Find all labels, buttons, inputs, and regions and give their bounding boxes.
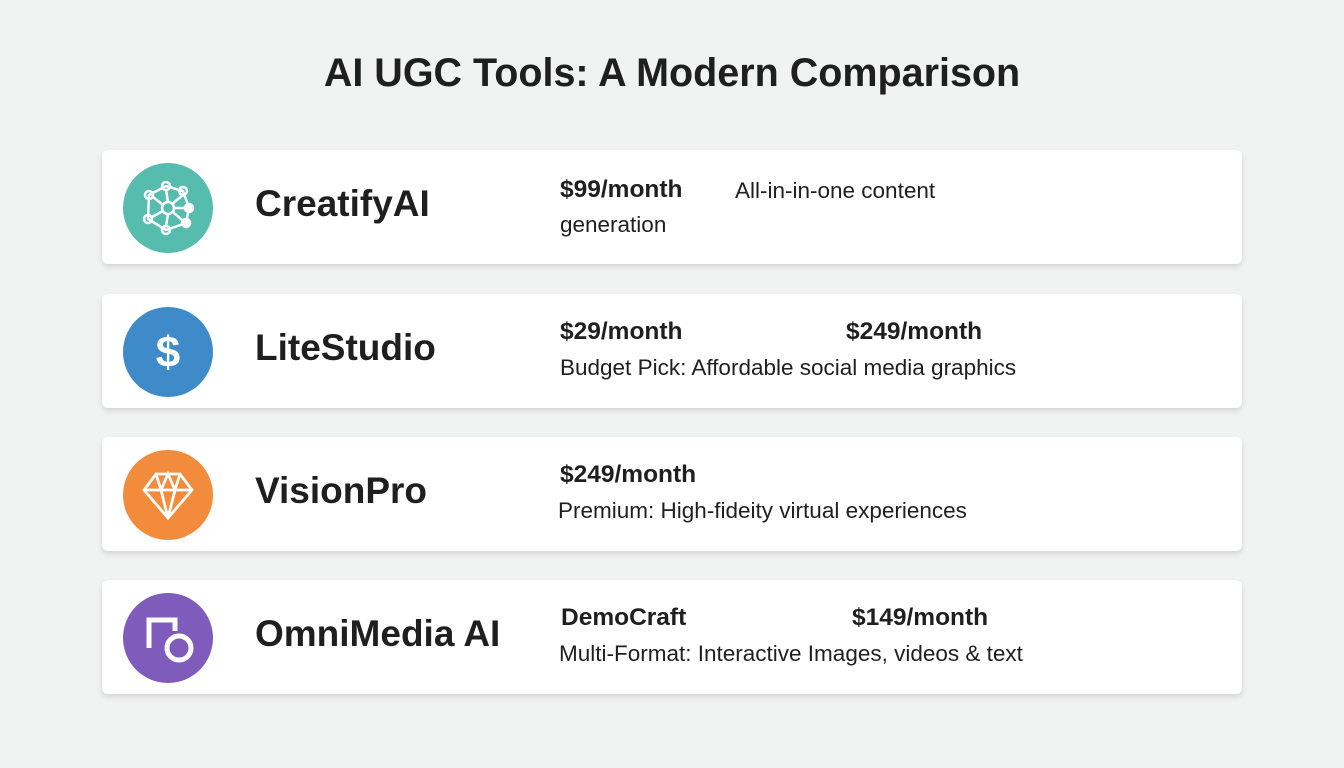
price: $249/month: [560, 461, 696, 488]
price: $149/month: [852, 604, 988, 631]
title: AI UGC Tools: A Modern Comparison: [324, 51, 1020, 95]
icon: dollar: [123, 307, 213, 397]
card: OmniMedia AI: [102, 580, 1242, 694]
description: Premium: High-fideity virtual experiences: [558, 498, 967, 523]
card: LiteStudio: $249/month: [846, 318, 982, 345]
name: LiteStudio: [255, 327, 436, 368]
name: CreatifyAI: [255, 183, 430, 224]
name: OmniMedia AI: [255, 613, 500, 654]
name: VisionPro: [255, 470, 427, 511]
card: CreatifyAI: [102, 150, 1242, 264]
prices: $29/month: [560, 318, 683, 345]
icon: dollar: $: [156, 328, 180, 377]
description: Multi-Format: Interactive Images, videos & text: [559, 641, 1023, 666]
icon: diamond: [123, 450, 213, 540]
card: VisionPro: [102, 437, 1242, 551]
description: All-in-in-one content: [735, 178, 935, 203]
card: LiteStudio: [102, 294, 1242, 408]
description: Budget Pick: Affordable social media graphics: [560, 355, 1016, 380]
product: DemoCraft: [561, 604, 686, 631]
card: CreatifyAI: generation: [560, 212, 666, 237]
icon: shapes: [123, 593, 213, 683]
icon: network: [123, 163, 213, 253]
price: $99/month: [560, 176, 683, 203]
